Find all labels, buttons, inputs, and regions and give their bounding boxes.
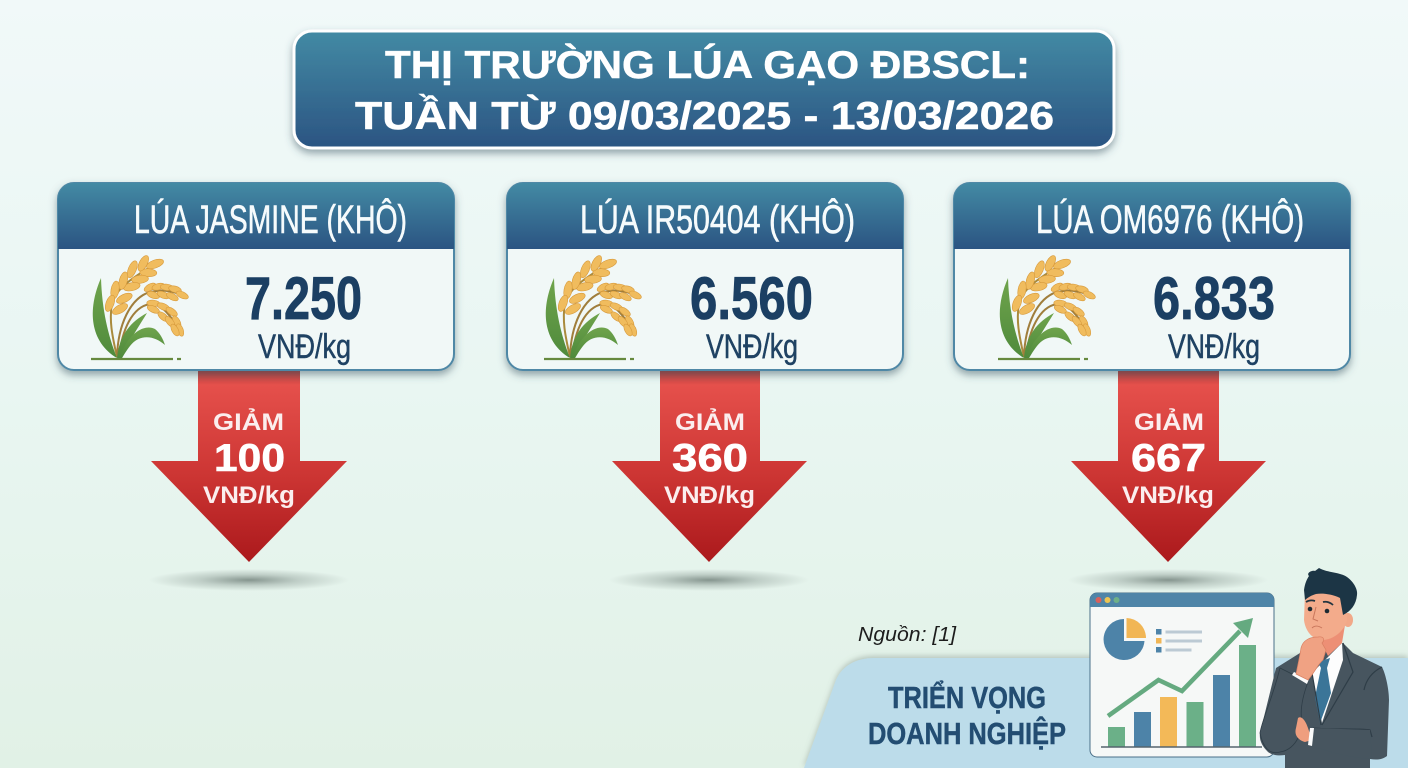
ear xyxy=(1343,613,1353,627)
hair xyxy=(1304,568,1357,615)
outlook heading xyxy=(868,680,1066,751)
panel: Lúa IR50404 xyxy=(507,183,903,370)
value: 100: 100 xyxy=(214,437,285,480)
title line 2: TUẦN TỪ 09/03/2025 - 13/03/2026 xyxy=(355,94,1054,138)
unit: VNĐ/kg xyxy=(203,482,295,509)
title line 1: THỊ TRƯỜNG LÚA GẠO ĐBSCL: xyxy=(385,43,1030,87)
facial features xyxy=(1306,600,1333,628)
cuff xyxy=(1292,672,1309,684)
label: giảm: GIẢM xyxy=(213,407,284,436)
card heading: LÚA JASMINE (KHÔ) xyxy=(134,197,407,242)
pie legend xyxy=(1156,629,1202,652)
bar chart xyxy=(1101,645,1262,747)
price: 6.560 xyxy=(690,265,813,332)
lapel lines xyxy=(1312,643,1382,737)
price: 6.833 xyxy=(1153,265,1275,332)
unit: VNĐ/kg xyxy=(1168,328,1260,366)
label: giảm: GIẢM xyxy=(1134,407,1204,436)
icon: rice plant xyxy=(544,254,643,359)
neck xyxy=(1320,625,1345,656)
arrow: Jasmine decrease xyxy=(151,371,347,562)
arrow: growth trend xyxy=(1108,618,1253,716)
label: giảm: GIẢM xyxy=(675,407,745,436)
chart window xyxy=(1090,593,1274,757)
businessman thinking xyxy=(1260,568,1389,768)
unit: VNĐ/kg xyxy=(706,328,798,366)
unit: VNĐ/kg xyxy=(258,328,351,366)
panel: business outlook xyxy=(804,658,1408,768)
arrow shadow 1 xyxy=(149,569,349,591)
heading line 2: DOANH NGHIỆP xyxy=(868,715,1066,751)
shirt xyxy=(1312,643,1343,723)
pie chart xyxy=(1104,618,1146,660)
arrow shadow 2 xyxy=(609,569,809,591)
panel: Lúa Jasmine xyxy=(58,183,454,370)
lower sleeve xyxy=(1312,728,1372,759)
card heading: LÚA IR50404 (KHÔ) xyxy=(580,197,855,242)
title banner xyxy=(294,31,1114,148)
unit: VNĐ/kg xyxy=(664,482,755,509)
card heading: LÚA OM6976 (KHÔ) xyxy=(1036,197,1304,242)
price: 7.250 xyxy=(245,265,362,332)
icon: rice plant xyxy=(998,254,1097,359)
tie xyxy=(1315,658,1331,723)
hand at chin xyxy=(1296,637,1326,680)
heading line 1: TRIỂN VỌNG xyxy=(888,680,1046,715)
panel: Lúa OM6976 xyxy=(954,183,1350,370)
face xyxy=(1304,590,1347,640)
value: 667: 667 xyxy=(1131,437,1206,480)
unit: VNĐ/kg xyxy=(1122,482,1214,509)
arrow shadow 3 xyxy=(1068,569,1268,591)
arrow: OM6976 decrease xyxy=(1071,371,1266,562)
source note: Nguồn: [1] xyxy=(858,624,956,646)
lower cuff xyxy=(1308,728,1314,746)
lower hand xyxy=(1295,717,1312,742)
value: 360: 360 xyxy=(672,437,748,480)
jacket xyxy=(1260,643,1389,768)
arrow: IR50404 decrease xyxy=(612,371,807,562)
icon: rice plant xyxy=(91,254,190,359)
raised sleeve xyxy=(1260,668,1308,753)
